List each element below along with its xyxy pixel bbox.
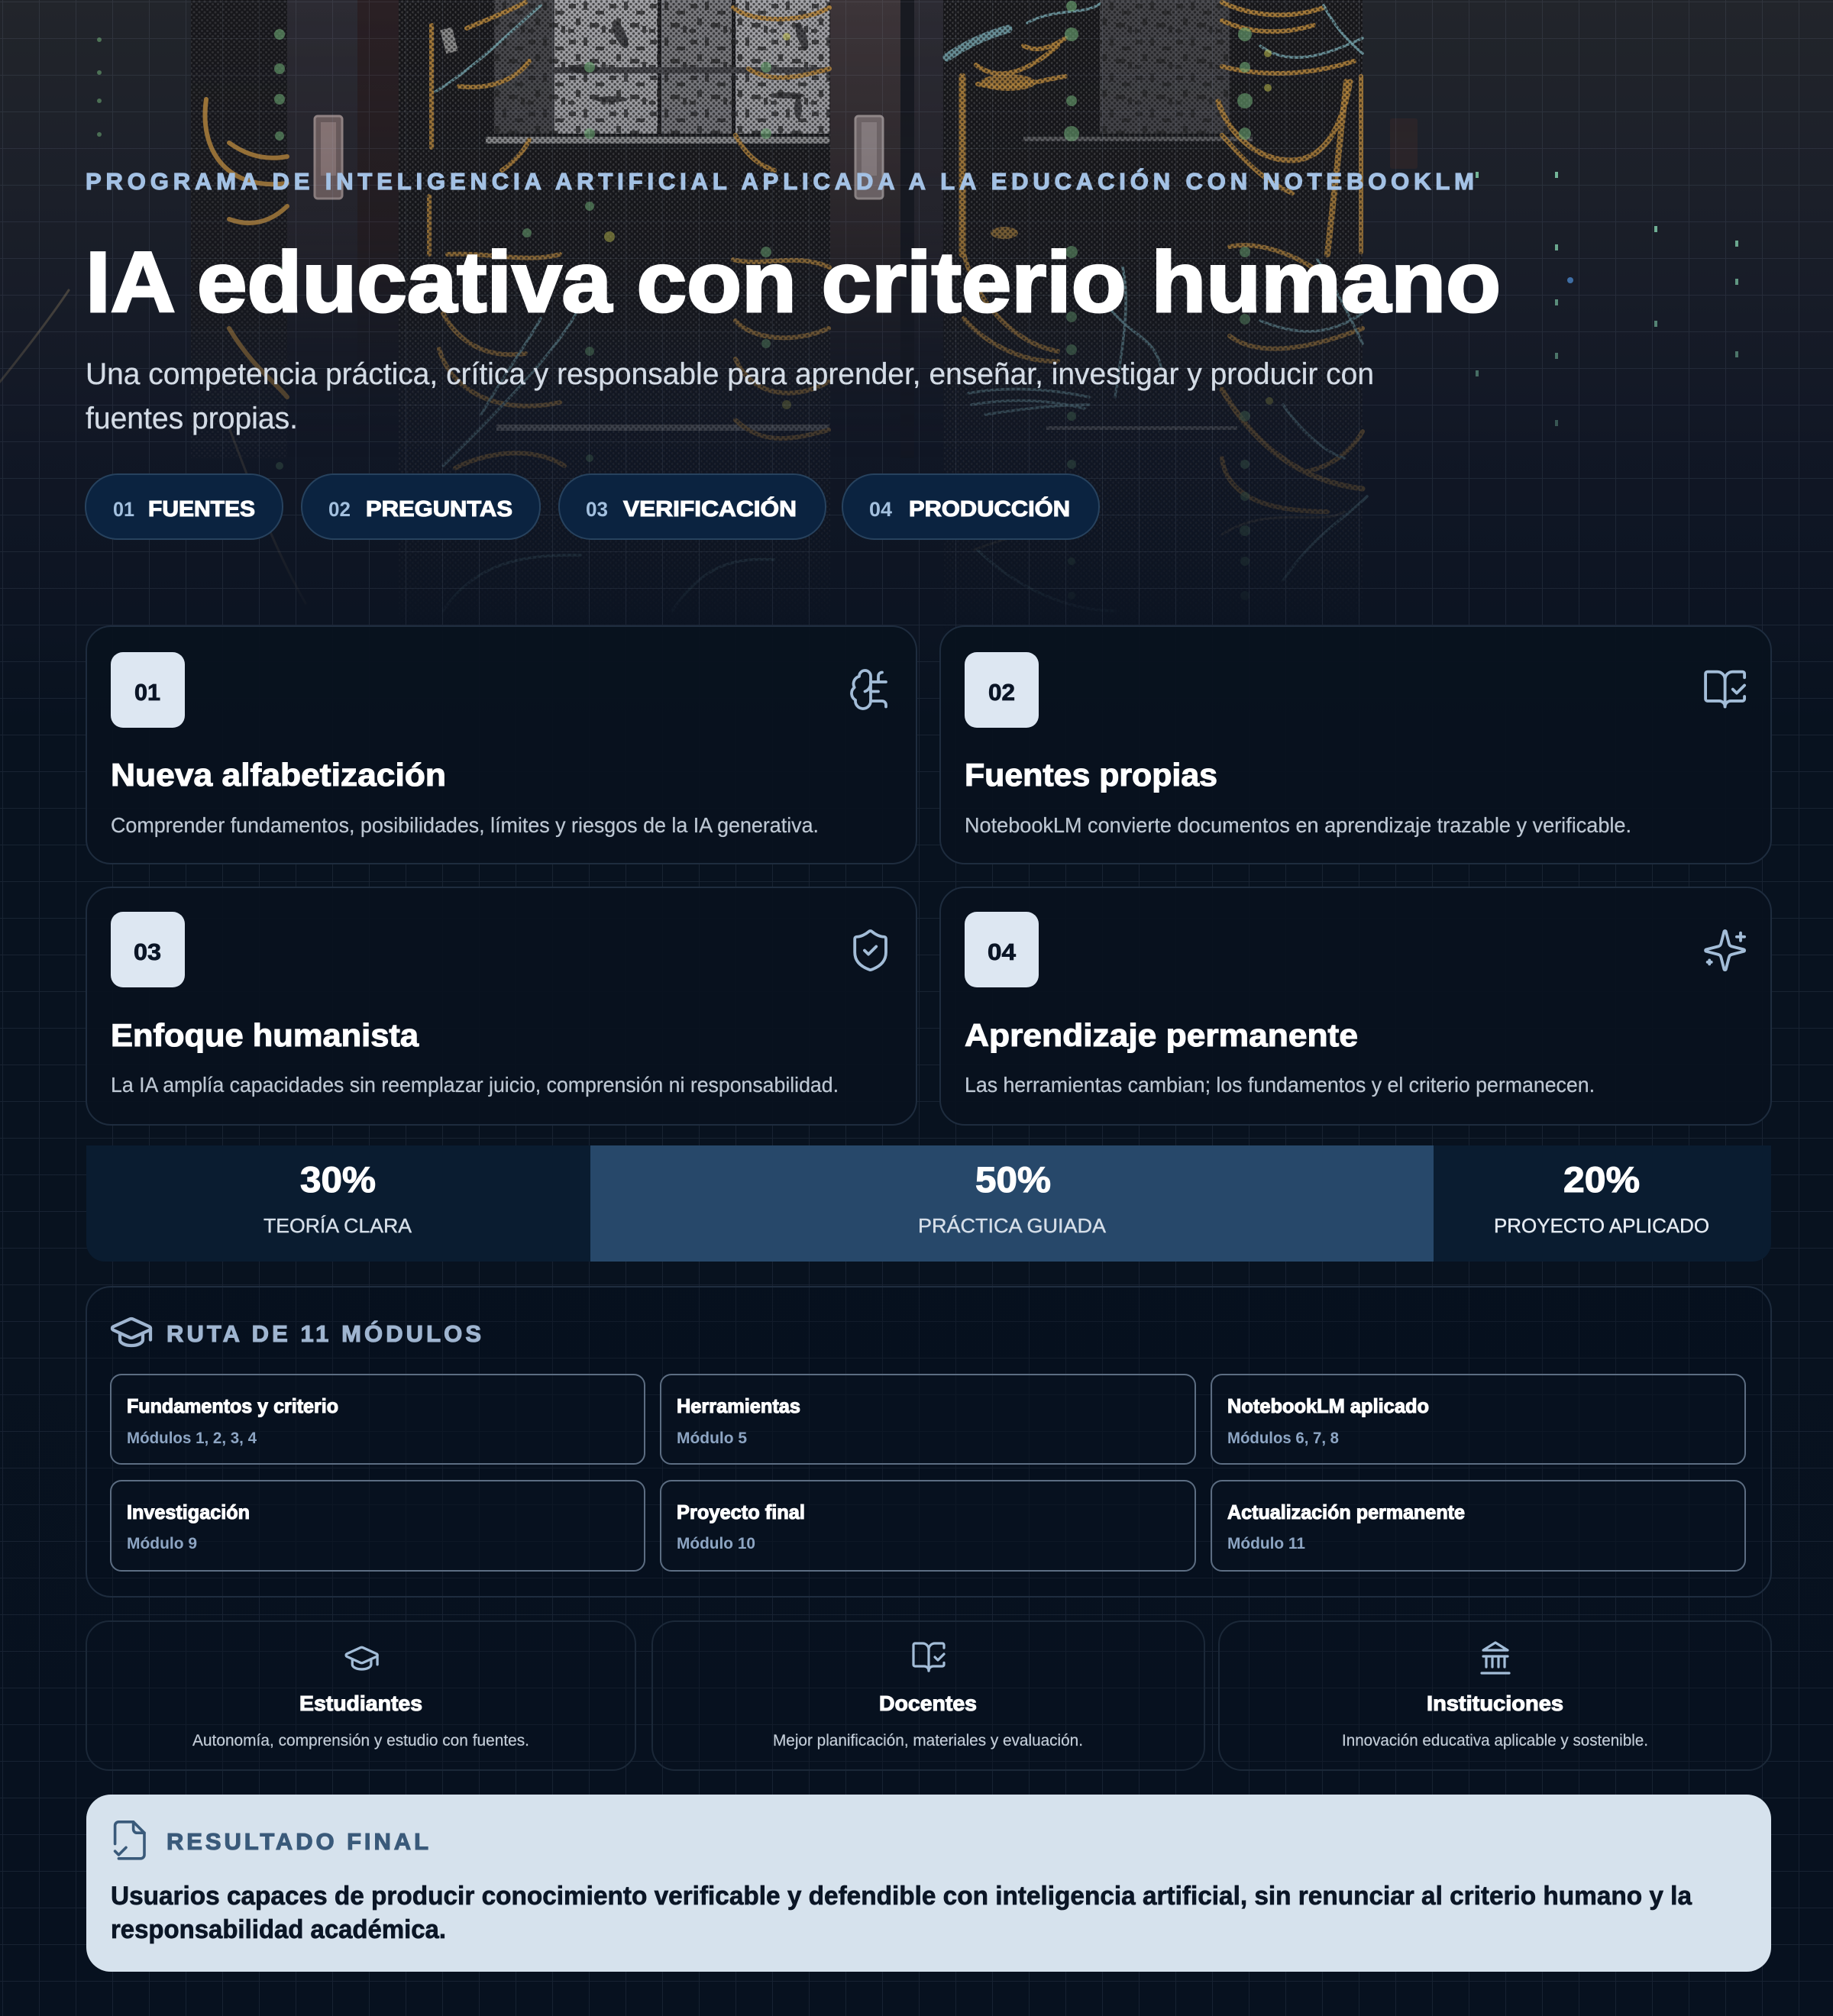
module: proyecto final: Módulo 10 <box>677 1535 755 1552</box>
panel: docentes: Mejor planificación, materiales y evaluación. <box>773 1732 1083 1749</box>
panel: instituciones: Innovación educativa aplicable y sostenible. <box>1342 1732 1648 1749</box>
segment: práctica guiada: PRÁCTICA GUIADA <box>918 1214 1107 1237</box>
module: herramientas: Módulo 5 <box>677 1430 747 1447</box>
module: actualización: Actualización permanente <box>1227 1501 1465 1523</box>
subtitle: Una competencia práctica, crítica y responsable para aprender, enseñar, investigar y producir con <box>86 357 1374 391</box>
panel: card 01: 01 <box>134 679 160 706</box>
icon: landmark <box>1482 1643 1509 1673</box>
pill: producción: PRODUCCIÓN <box>909 496 1070 522</box>
panel: card 04: Aprendizaje permanente <box>965 1017 1358 1053</box>
icon: sparkles <box>1705 931 1744 970</box>
panel: card 02: 02 <box>988 679 1015 706</box>
module: herramientas: Herramientas <box>677 1394 800 1417</box>
heading: RESULTADO FINAL <box>166 1828 428 1855</box>
module: actualización: Módulo 11 <box>1227 1535 1305 1552</box>
icon: brain <box>852 670 886 709</box>
background photo: server rack with cables <box>0 0 1738 634</box>
step pills <box>86 474 1099 539</box>
segment: proyecto aplicado: 20% <box>1563 1159 1640 1200</box>
panel: card 04: Las herramientas cambian; los fundamentos y el criterio permanecen. <box>965 1073 1595 1097</box>
panel: card 04: 04 <box>988 939 1017 965</box>
text block: Usuarios capaces de producir conocimiento verificable y defendible con inteligencia artificial, sin renunciar al criterio humano y la <box>111 1882 1692 1911</box>
panel: card 02 <box>940 626 1771 864</box>
module: investigación: Investigación <box>127 1501 250 1523</box>
pill: preguntas: PREGUNTAS <box>366 497 512 522</box>
subtitle <box>86 357 1374 435</box>
panel: docentes: Docentes <box>879 1691 977 1715</box>
segment: teoría clara: 30% <box>300 1159 376 1200</box>
panel: card 02: NotebookLM convierte documentos en aprendizaje trazable y verificable. <box>965 813 1631 837</box>
pill: preguntas: 02 <box>328 498 351 521</box>
segment: teoría clara <box>86 1145 590 1262</box>
icon: book check <box>1705 672 1744 707</box>
module: fundamentos: Módulos 1, 2, 3, 4 <box>127 1430 257 1447</box>
panel: card 03 <box>86 887 916 1125</box>
chart: 30 50 20 proportion bar <box>86 1145 1771 1262</box>
pill: verificación: VERIFICACIÓN <box>623 496 797 522</box>
panel: card 02: Fuentes propias <box>965 757 1217 793</box>
module: notebooklm <box>1211 1375 1745 1464</box>
panel: instituciones: Instituciones <box>1427 1691 1563 1715</box>
module: investigación <box>111 1481 645 1571</box>
panel: card 01 <box>86 626 916 864</box>
subtitle: fuentes propias. <box>86 402 298 435</box>
module: investigación: Módulo 9 <box>127 1535 197 1552</box>
text block <box>111 1882 1692 1944</box>
panel: estudiantes: Estudiantes <box>299 1691 422 1715</box>
module: fundamentos: Fundamentos y criterio <box>127 1394 338 1417</box>
panel: card 01: Comprender fundamentos, posibilidades, límites y riesgos de la IA generativa. <box>111 813 819 837</box>
panel: instituciones <box>1219 1621 1771 1770</box>
module: notebooklm: Módulos 6, 7, 8 <box>1227 1430 1339 1447</box>
panel: estudiantes: Autonomía, comprensión y estudio con fuentes. <box>192 1732 529 1749</box>
segment: práctica guiada: 50% <box>975 1159 1051 1200</box>
eyebrow: PROGRAMA DE INTELIGENCIA ARTIFICIAL APLICADA A LA EDUCACIÓN CON NOTEBOOKLM <box>86 167 1474 195</box>
text block: responsabilidad académica. <box>111 1915 446 1944</box>
panel: card 03: La IA amplía capacidades sin reemplazar juicio, comprensión ni responsabilidad. <box>111 1073 839 1097</box>
pill: fuentes <box>86 474 283 539</box>
segment: práctica guiada <box>590 1145 1434 1262</box>
module: actualización <box>1211 1481 1745 1571</box>
module: herramientas <box>661 1375 1195 1464</box>
icon: shield check <box>855 931 886 970</box>
pill: fuentes: FUENTES <box>148 497 255 522</box>
panel: card 03: 03 <box>134 939 161 965</box>
segment: proyecto aplicado <box>1434 1145 1771 1262</box>
panel: resultado final <box>86 1795 1771 1972</box>
pill: producción: 04 <box>869 498 892 521</box>
pill: verificación: 03 <box>586 498 608 521</box>
panel: docentes <box>652 1621 1204 1770</box>
pill: verificación <box>559 474 826 539</box>
panel: card 03: Enfoque humanista <box>111 1017 419 1053</box>
icon: graduation cap small <box>346 1647 377 1669</box>
icon: graduation cap <box>112 1319 150 1346</box>
panel: estudiantes <box>86 1621 635 1770</box>
icon: file check <box>115 1822 144 1859</box>
panel: card 04 <box>940 887 1771 1125</box>
icon: book small <box>913 1643 944 1671</box>
panel: ruta de 11 módulos <box>86 1287 1771 1597</box>
pill: preguntas <box>302 474 540 539</box>
module: fundamentos <box>111 1375 645 1464</box>
segment: proyecto aplicado: PROYECTO APLICADO <box>1494 1214 1709 1237</box>
heading: RUTA DE 11 MÓDULOS <box>166 1320 481 1347</box>
pill: fuentes: 01 <box>113 498 134 521</box>
pill: producción <box>842 474 1099 539</box>
module: notebooklm: NotebookLM aplicado <box>1227 1394 1429 1417</box>
panel: card 01: Nueva alfabetización <box>111 757 446 793</box>
module: proyecto final: Proyecto final <box>677 1501 805 1523</box>
segment: teoría clara: TEORÍA CLARA <box>263 1214 412 1237</box>
title: IA educativa con criterio humano <box>86 234 1501 330</box>
module: proyecto final <box>661 1481 1195 1571</box>
